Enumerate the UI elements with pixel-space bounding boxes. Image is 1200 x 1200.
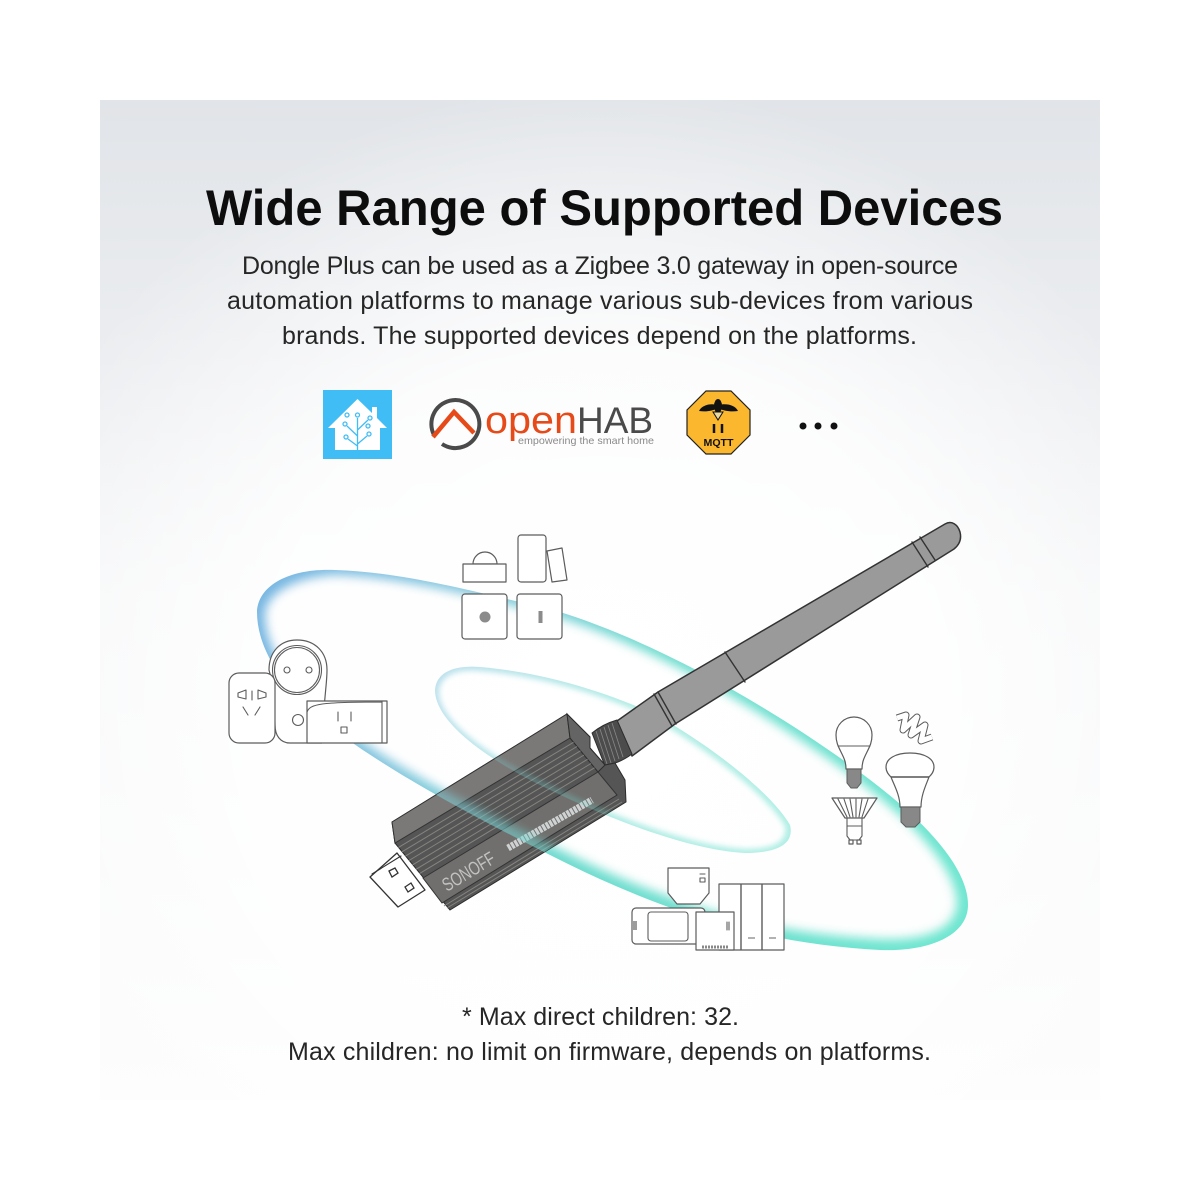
spot bulb — [832, 798, 877, 818]
title: Wide Range of Supported Devices — [206, 180, 1003, 236]
dongle label band — [423, 772, 617, 903]
LED strip — [897, 715, 932, 741]
intro text — [227, 252, 973, 350]
ring overlay on dongle — [436, 756, 612, 852]
icon: openHAB: open — [485, 400, 577, 442]
bulb — [836, 717, 872, 769]
dongle body — [392, 714, 626, 910]
dongle top face — [392, 714, 570, 843]
device group: bulbs — [832, 715, 934, 844]
connector — [592, 720, 632, 766]
ellipsis — [800, 422, 838, 430]
dongle end cap — [567, 714, 605, 772]
icon: openHAB: HAB — [577, 400, 653, 441]
device group: switches — [632, 868, 784, 950]
background panel — [100, 100, 1100, 1100]
footnote — [288, 1003, 931, 1066]
USB plug — [370, 853, 425, 907]
icon: Home Assistant — [323, 390, 392, 459]
icon: openHAB — [431, 400, 654, 448]
icon: openHAB: empowering the smart home — [518, 435, 654, 447]
intro text: Dongle Plus can be used as a Zigbee 3.0 gateway in open-source — [242, 252, 958, 280]
antenna — [617, 523, 961, 756]
dongle — [369, 712, 626, 910]
device group: sensors — [462, 535, 567, 639]
intro text: brands. The supported devices depend on the platforms. — [282, 322, 917, 350]
icon: MQTT bee: MQTT — [704, 437, 734, 449]
platform logos — [323, 390, 838, 459]
spec strip — [508, 800, 592, 848]
footnote: Max children: no limit on firmware, depends on platforms. — [288, 1038, 931, 1066]
brand mark: SONOFF — [439, 848, 499, 896]
signal ring: outer — [250, 560, 975, 960]
signal ring: inner — [435, 666, 791, 853]
device group: smart plugs — [229, 640, 387, 743]
large bulb — [886, 753, 934, 807]
dongle ribs — [398, 742, 622, 908]
footnote: * Max direct children: 32. — [462, 1003, 739, 1031]
icon: MQTT bee — [687, 391, 750, 454]
intro text: automation platforms to manage various sub-devices from various — [227, 287, 973, 315]
